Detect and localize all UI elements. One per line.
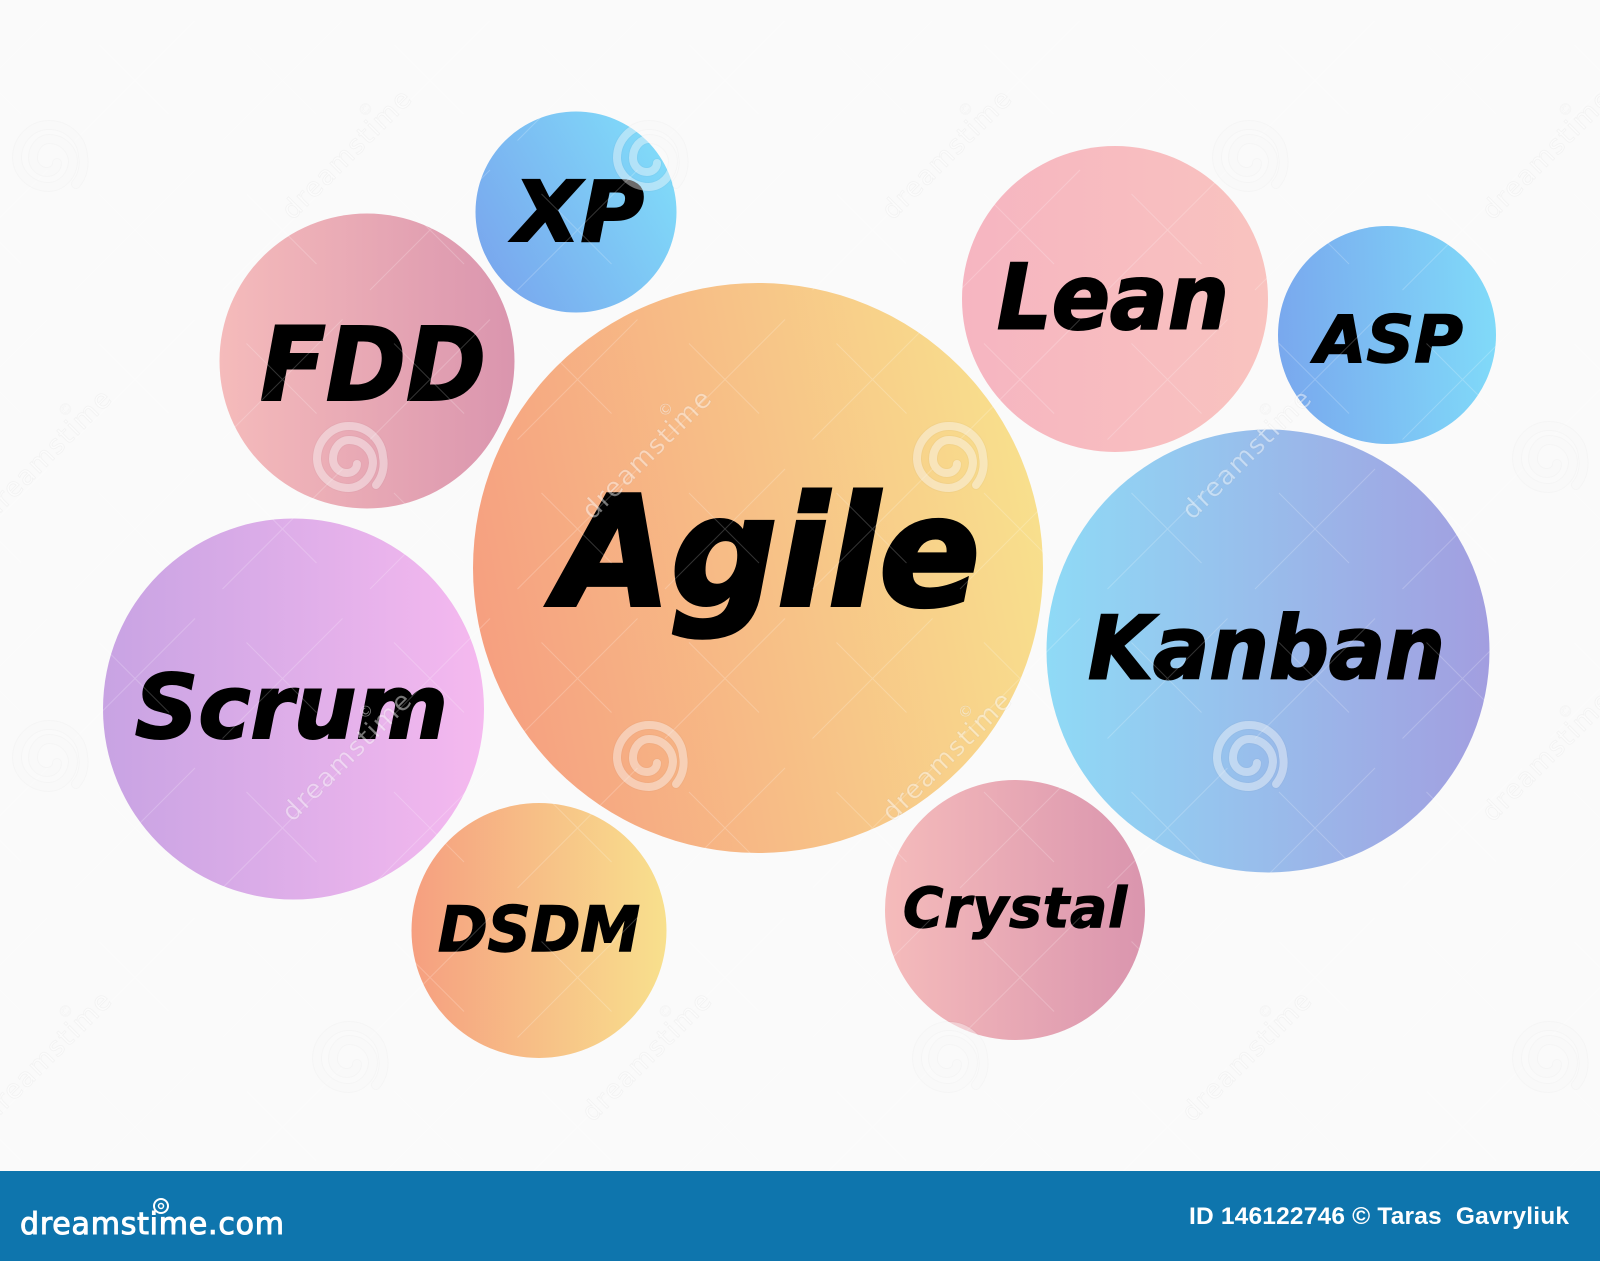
- watermark text: dreamstime: [876, 84, 1018, 226]
- watermark text: ©: [654, 1000, 677, 1023]
- footer credit: ID 146122746 © Taras Gavryliuk: [1189, 1203, 1569, 1230]
- watermark text: ©: [54, 1000, 77, 1023]
- watermark text: dreamstime: [1176, 986, 1318, 1128]
- watermark text: ©: [954, 700, 977, 723]
- bubble: Kanban: [1046, 430, 1490, 872]
- watermark text: dreamstime: [1176, 384, 1318, 526]
- bubble: Crystal: [885, 780, 1145, 1040]
- watermark spirals: [17, 125, 1584, 1088]
- label: ASP: ASP: [1310, 303, 1463, 378]
- watermark text: ©: [1554, 98, 1577, 121]
- watermark text: ©: [1254, 398, 1277, 421]
- watermark text: ©: [654, 398, 677, 421]
- watermark text: dreamstime: [276, 84, 418, 226]
- label: Agile: Agile: [546, 464, 980, 641]
- watermark text: ©: [354, 700, 377, 723]
- watermark text: ©: [1254, 1000, 1277, 1023]
- watermark text: dreamstime: [276, 686, 418, 828]
- watermark text: ©: [354, 98, 377, 121]
- label: Crystal: Crystal: [903, 876, 1128, 940]
- label: Scrum: Scrum: [135, 656, 448, 759]
- bubble: Lean: [962, 146, 1268, 452]
- watermark text: ©: [54, 398, 77, 421]
- label: Lean: Lean: [997, 246, 1229, 350]
- label: FDD: FDD: [260, 306, 486, 425]
- footer logo: dreamstime.com: dreamstime.com: [20, 1207, 284, 1242]
- bubble: FDD: [220, 214, 514, 508]
- watermark text: ©: [1554, 700, 1577, 723]
- bubble: Agile: [473, 283, 1043, 853]
- label: Kanban: Kanban: [1088, 598, 1445, 700]
- watermark text: dreamstime: [576, 986, 718, 1128]
- watermark text: dreamstime: [576, 384, 718, 526]
- bubble: DSDM: [412, 803, 666, 1058]
- watermark text: dreamstime: [876, 686, 1018, 828]
- bubble: Scrum: [103, 518, 484, 900]
- watermark text: ©: [954, 98, 977, 121]
- footer bar: [0, 1171, 1600, 1261]
- bubble: ASP: [1278, 226, 1496, 444]
- label: DSDM: DSDM: [438, 893, 640, 966]
- label: XP: XP: [509, 163, 644, 261]
- bubble: XP: [476, 112, 676, 312]
